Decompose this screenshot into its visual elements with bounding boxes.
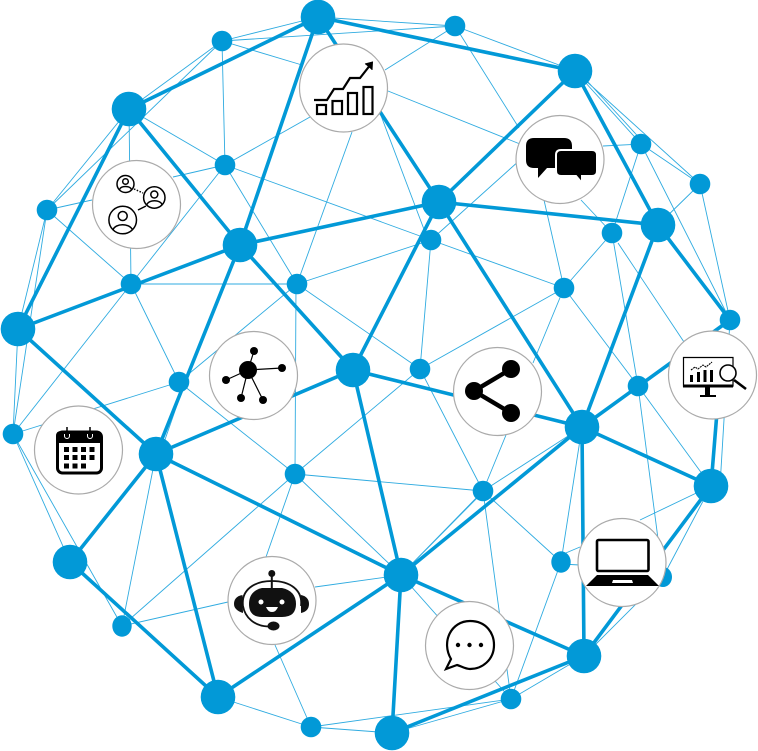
icon: calendar: [56, 427, 102, 473]
icon: two solid speech bubbles: [526, 138, 597, 183]
badge: hub network: [210, 332, 298, 420]
icon: share symbol: [465, 360, 520, 422]
badge: laptop: [578, 518, 666, 606]
icon: three linked user profiles: [109, 176, 165, 234]
badge: chat message: [426, 602, 514, 690]
badge: chatbot: [228, 556, 316, 644]
badge: connected users: [92, 160, 180, 248]
icon: robot head with headset: [234, 570, 309, 630]
icon: laptop: [586, 540, 659, 586]
icon: monitor with chart and magnifier: [683, 358, 746, 397]
badge: growth chart: [300, 44, 388, 132]
icon: outlined chat bubble with dots: [446, 621, 494, 669]
icon: rising bars with arrow: [314, 62, 372, 114]
badge: calendar: [34, 406, 122, 494]
badge: share: [454, 348, 542, 436]
badge: speech bubbles: [516, 116, 604, 204]
icon: hub and spoke nodes: [222, 347, 286, 404]
badge: data analysis: [668, 331, 756, 419]
